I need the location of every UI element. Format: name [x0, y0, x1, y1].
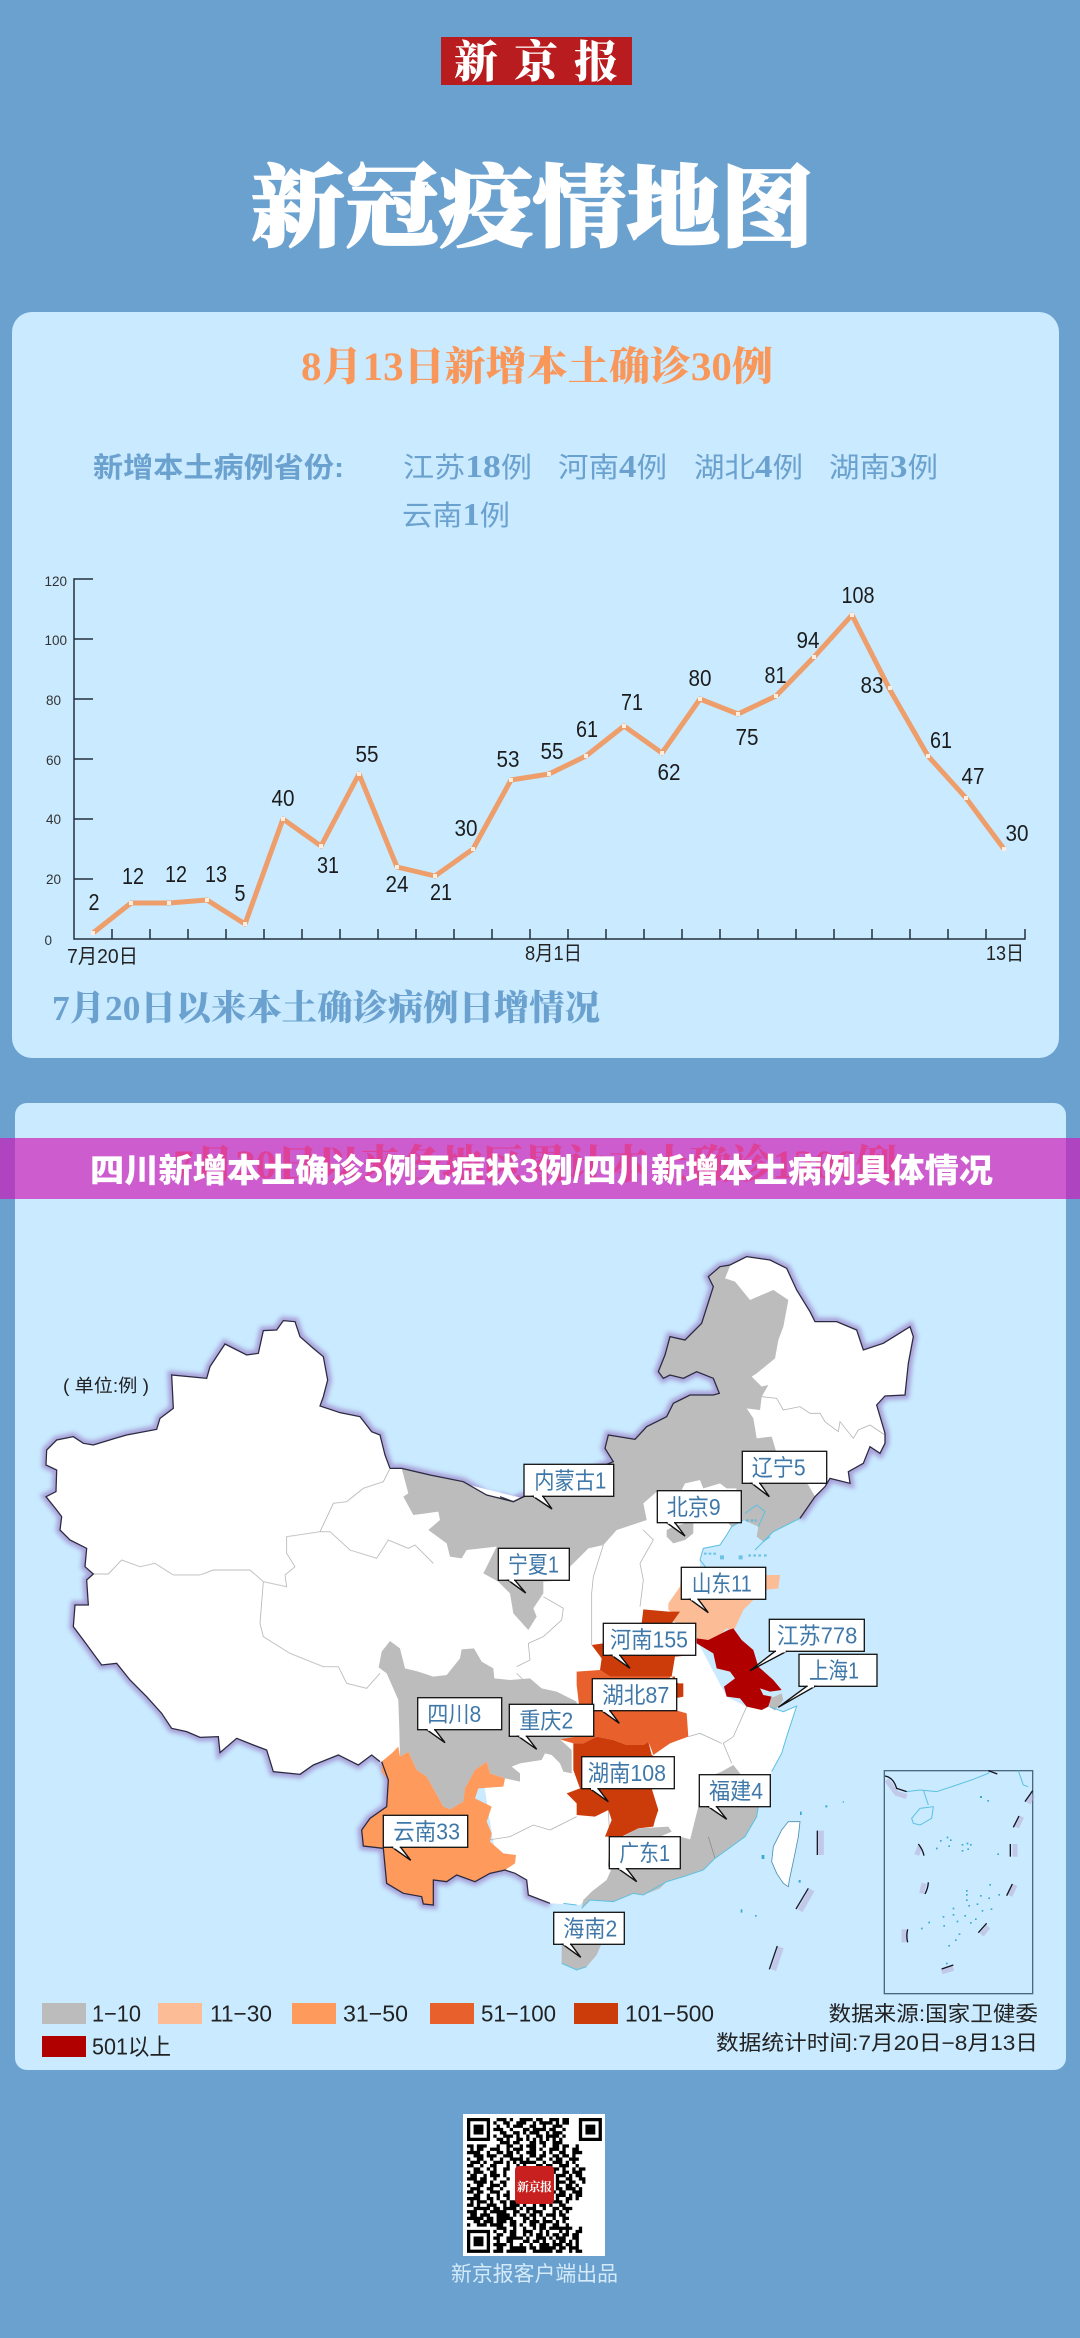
legend: 1-10 [42, 2000, 141, 2026]
inset land border glow [887, 1780, 1033, 1972]
x axis labels: 7月20日 [67, 946, 138, 968]
label: Chongqing: 重庆2 [519, 1708, 573, 1734]
hidden heading under banner: 7月20日以来各地区累计本土确诊1206例 [173, 1142, 897, 1187]
chart axes [74, 579, 1025, 939]
data value labels: 31 [317, 852, 339, 878]
label: Hunan: 湖南108 [588, 1760, 666, 1786]
data value labels: 2 [88, 889, 100, 915]
dark land border [46, 1257, 913, 1905]
province list values: 云南1例 [402, 496, 510, 532]
unit note: ( 单位:例 ) [63, 1376, 149, 1396]
masthead logo: 新京报 [454, 37, 618, 87]
data markers [91, 613, 1006, 935]
data value labels: 108 [842, 582, 874, 608]
label: Jiangsu: 江苏778 [777, 1622, 857, 1648]
inset coast [907, 1771, 1028, 1825]
province list values: 河南4例 [558, 448, 667, 484]
legend: 101-500: 101−500 [625, 2000, 714, 2026]
label: Beijing [657, 1491, 741, 1536]
label: Beijing: 北京9 [667, 1494, 721, 1520]
data value labels: 62 [658, 759, 680, 785]
label: Fujian: 福建4 [709, 1778, 763, 1804]
data value labels: 61 [576, 716, 598, 742]
data value labels: 94 [796, 627, 820, 653]
land: western provinces [46, 1321, 530, 1774]
data value labels: 55 [356, 741, 378, 767]
nine-dash segments [769, 1831, 821, 1970]
province: Fujian [690, 1765, 758, 1858]
data value labels: 80 [688, 665, 712, 691]
y axis labels: 60 [46, 753, 61, 768]
province: Henan [592, 1609, 695, 1698]
QR code [463, 2114, 605, 2256]
label: Ningxia: 宁夏1 [508, 1552, 559, 1578]
y axis labels: 80 [46, 693, 61, 708]
land: central and southern provinces [438, 1580, 797, 1905]
data value labels: 47 [962, 763, 984, 789]
inset dashes [885, 1771, 1033, 1969]
province: Inner Mongolia west [402, 1468, 530, 1558]
data line [93, 615, 1004, 933]
map of China [46, 1257, 1033, 1994]
panel: daily trend [12, 312, 1059, 1058]
label: Yunnan: 云南33 [393, 1818, 460, 1844]
footer credit: 新京报客户端出品 [451, 2263, 618, 2286]
data value labels: 71 [621, 689, 643, 715]
line chart [44, 574, 1028, 968]
province list values: 江苏18例 [403, 448, 532, 484]
data value labels: 12 [122, 863, 144, 889]
label: Fujian [699, 1775, 770, 1819]
data value labels: 5 [234, 880, 246, 906]
data value labels: 13 [205, 861, 227, 887]
label: Shanghai [778, 1654, 877, 1707]
province: Yunnan [362, 1747, 516, 1905]
x axis labels: 8月1日 [525, 943, 582, 965]
x axis labels: 13日 [986, 943, 1024, 965]
data source note [716, 2003, 1038, 2055]
label: Hunan [582, 1757, 674, 1802]
chart caption: 7月20日以来本土确诊病例日增情况 [52, 988, 600, 1028]
province list label: 新增本土病例省份: [93, 452, 344, 483]
data value labels: 30 [1006, 820, 1028, 846]
banner text: 四川新增本土确诊5例无症状3例/四川新增本土病例具体情况 [90, 1152, 993, 1189]
label: Shanghai: 上海1 [809, 1658, 859, 1684]
data value labels: 83 [860, 672, 884, 698]
province: Shanghai [769, 1693, 783, 1711]
inset: South China Sea [884, 1771, 1033, 1994]
province: Hunan [567, 1737, 658, 1837]
data value labels: 75 [736, 724, 758, 750]
panel: map [15, 1103, 1066, 2070]
label: Hainan: 海南2 [563, 1916, 617, 1942]
inset islands [921, 1796, 1000, 1964]
QR finder patterns [467, 2118, 602, 2253]
data source note: 数据统计时间:7月20日−8月13日 [716, 2032, 1038, 2055]
label: Hubei: 湖北87 [602, 1682, 669, 1708]
legend: 101-500 [574, 2000, 714, 2026]
label: Henan: 河南155 [610, 1626, 688, 1652]
QR modules [467, 2120, 585, 2251]
legend: 51-100 [430, 2000, 556, 2026]
data value labels: 53 [496, 746, 520, 772]
province: Guangdong [582, 1827, 715, 1908]
province list values: 湖北4例 [694, 448, 803, 484]
y axis labels: 120 [44, 574, 67, 589]
y axis labels: 100 [44, 633, 67, 648]
label: Liaoning [742, 1451, 827, 1497]
label: Shandong: 山东11 [692, 1570, 752, 1596]
legend: 11-30: 11−30 [210, 2000, 272, 2026]
legend: 31-50 [292, 2000, 408, 2026]
legend: 51-100: 51−100 [481, 2000, 556, 2026]
label: Shandong [681, 1567, 766, 1613]
data source note: 数据来源:国家卫健委 [828, 2003, 1038, 2026]
legend: over 501: 501以上 [92, 2034, 171, 2060]
province colours: south [362, 1609, 797, 1970]
panel heading: 8月13日新增本土确诊30例 [301, 344, 773, 389]
province: Jiangsu [697, 1628, 782, 1710]
label: Guangdong: 广东1 [619, 1840, 670, 1866]
legend: 1-10: 1−10 [92, 2000, 141, 2026]
legend: 31-50: 31−50 [343, 2000, 408, 2026]
data value labels: 12 [165, 861, 187, 887]
y axis labels: 40 [46, 812, 61, 827]
island: Taiwan [772, 1822, 800, 1887]
province: Inner Mongolia, Ningxia, Liaoning [483, 1266, 815, 1642]
label: Henan [603, 1623, 696, 1668]
Taiwan and nine-dash line [741, 1801, 844, 1970]
province: Hubei [560, 1670, 688, 1755]
label: Sichuan [418, 1698, 502, 1743]
label: Chongqing [509, 1704, 594, 1749]
label: Sichuan: 四川8 [427, 1701, 481, 1727]
label: Yunnan [383, 1815, 468, 1860]
label: Ningxia [498, 1548, 569, 1593]
coastline: Bohai and Yellow Sea [700, 1505, 800, 1568]
QR centre logo [515, 2166, 554, 2204]
x axis labels [67, 943, 1024, 968]
province: Hainan [562, 1943, 602, 1970]
data value labels: 55 [540, 738, 564, 764]
province: Sichuan and Chongqing [379, 1641, 577, 1809]
overlay banner [0, 1138, 1080, 1199]
y axis labels: 0 [44, 933, 52, 948]
label: Liaoning: 辽宁5 [752, 1454, 806, 1480]
label: Jiangsu [750, 1619, 864, 1671]
label: Hainan [554, 1912, 624, 1957]
label: Guangdong [609, 1837, 680, 1882]
coastline [562, 1706, 797, 1970]
legend: over 501 [42, 2034, 171, 2060]
label: Inner Mongolia: 内蒙古1 [534, 1468, 606, 1494]
legend [42, 2000, 714, 2060]
label: Inner Mongolia [524, 1464, 614, 1509]
land: north and northeast [433, 1257, 913, 1673]
data value labels: 61 [930, 727, 952, 753]
data value labels [88, 582, 1028, 915]
border glow [46, 1257, 913, 1905]
data value labels: 24 [386, 871, 409, 897]
y axis labels: 20 [46, 872, 61, 887]
y axis labels [44, 574, 67, 948]
data value labels: 40 [272, 785, 294, 811]
data value labels: 21 [430, 879, 452, 905]
data value labels: 30 [454, 815, 478, 841]
QR centre logo: 新京报 [517, 2179, 552, 2194]
label: Hubei [592, 1679, 677, 1723]
main title: 新冠疫情地图 [251, 161, 814, 259]
legend: 11-30 [158, 2000, 272, 2026]
province list values [402, 448, 938, 532]
province list values: 湖南3例 [829, 448, 938, 484]
data value labels: 81 [764, 662, 786, 688]
